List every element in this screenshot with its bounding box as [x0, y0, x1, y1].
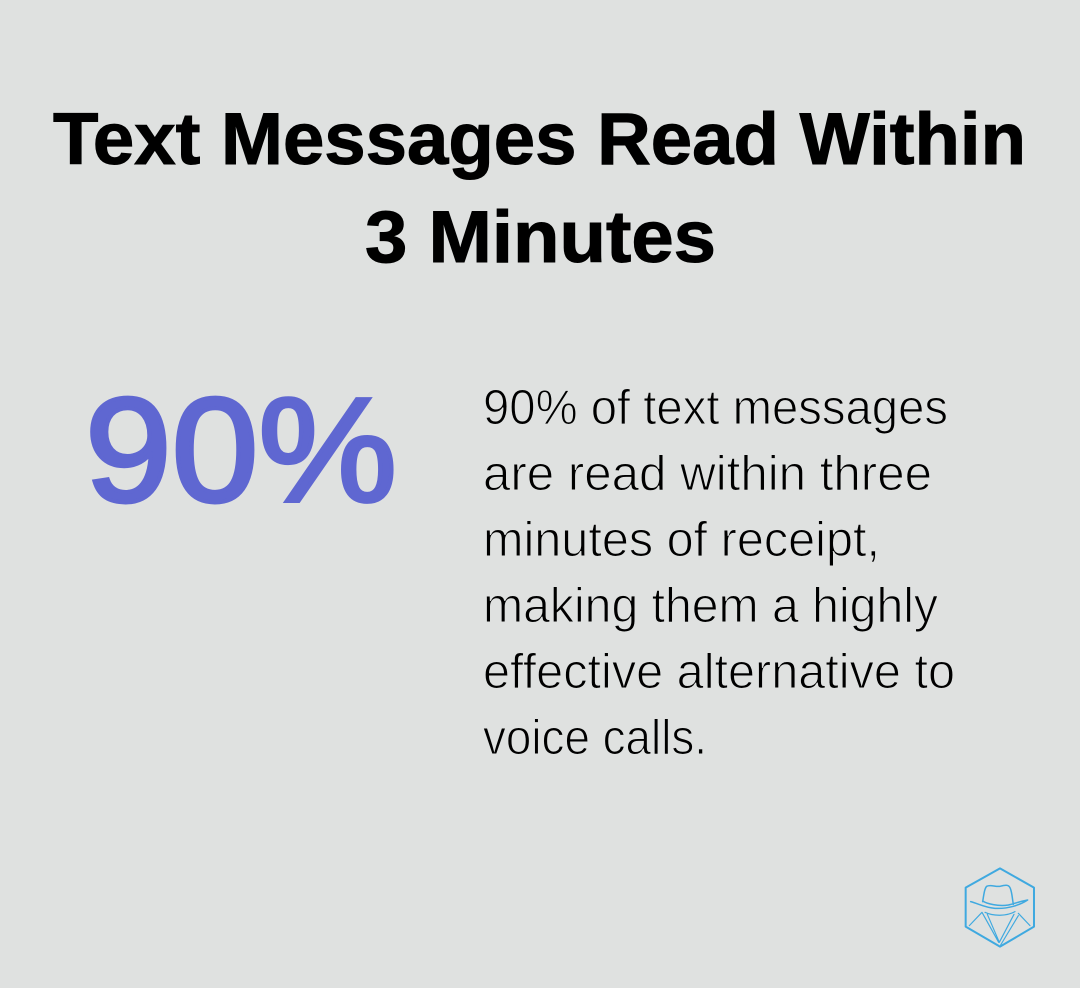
description text: effective alternative to	[483, 645, 955, 699]
icon part: hat	[971, 885, 1028, 908]
title	[53, 99, 1026, 278]
icon part: face and collar	[969, 912, 1030, 945]
icon part: hexagon outline	[966, 868, 1034, 947]
big stat: 90%: 90%	[85, 368, 397, 533]
title: 3 Minutes	[365, 197, 716, 278]
title: Text Messages Read Within	[53, 99, 1026, 180]
icon: hexagon spy logo	[966, 868, 1034, 947]
description text: voice calls.	[483, 711, 707, 765]
description text: are read within three	[483, 447, 932, 501]
description text: making them a highly	[483, 579, 938, 633]
description text	[483, 381, 955, 765]
description text: 90% of text messages	[483, 381, 948, 435]
description text: minutes of receipt,	[483, 513, 880, 567]
